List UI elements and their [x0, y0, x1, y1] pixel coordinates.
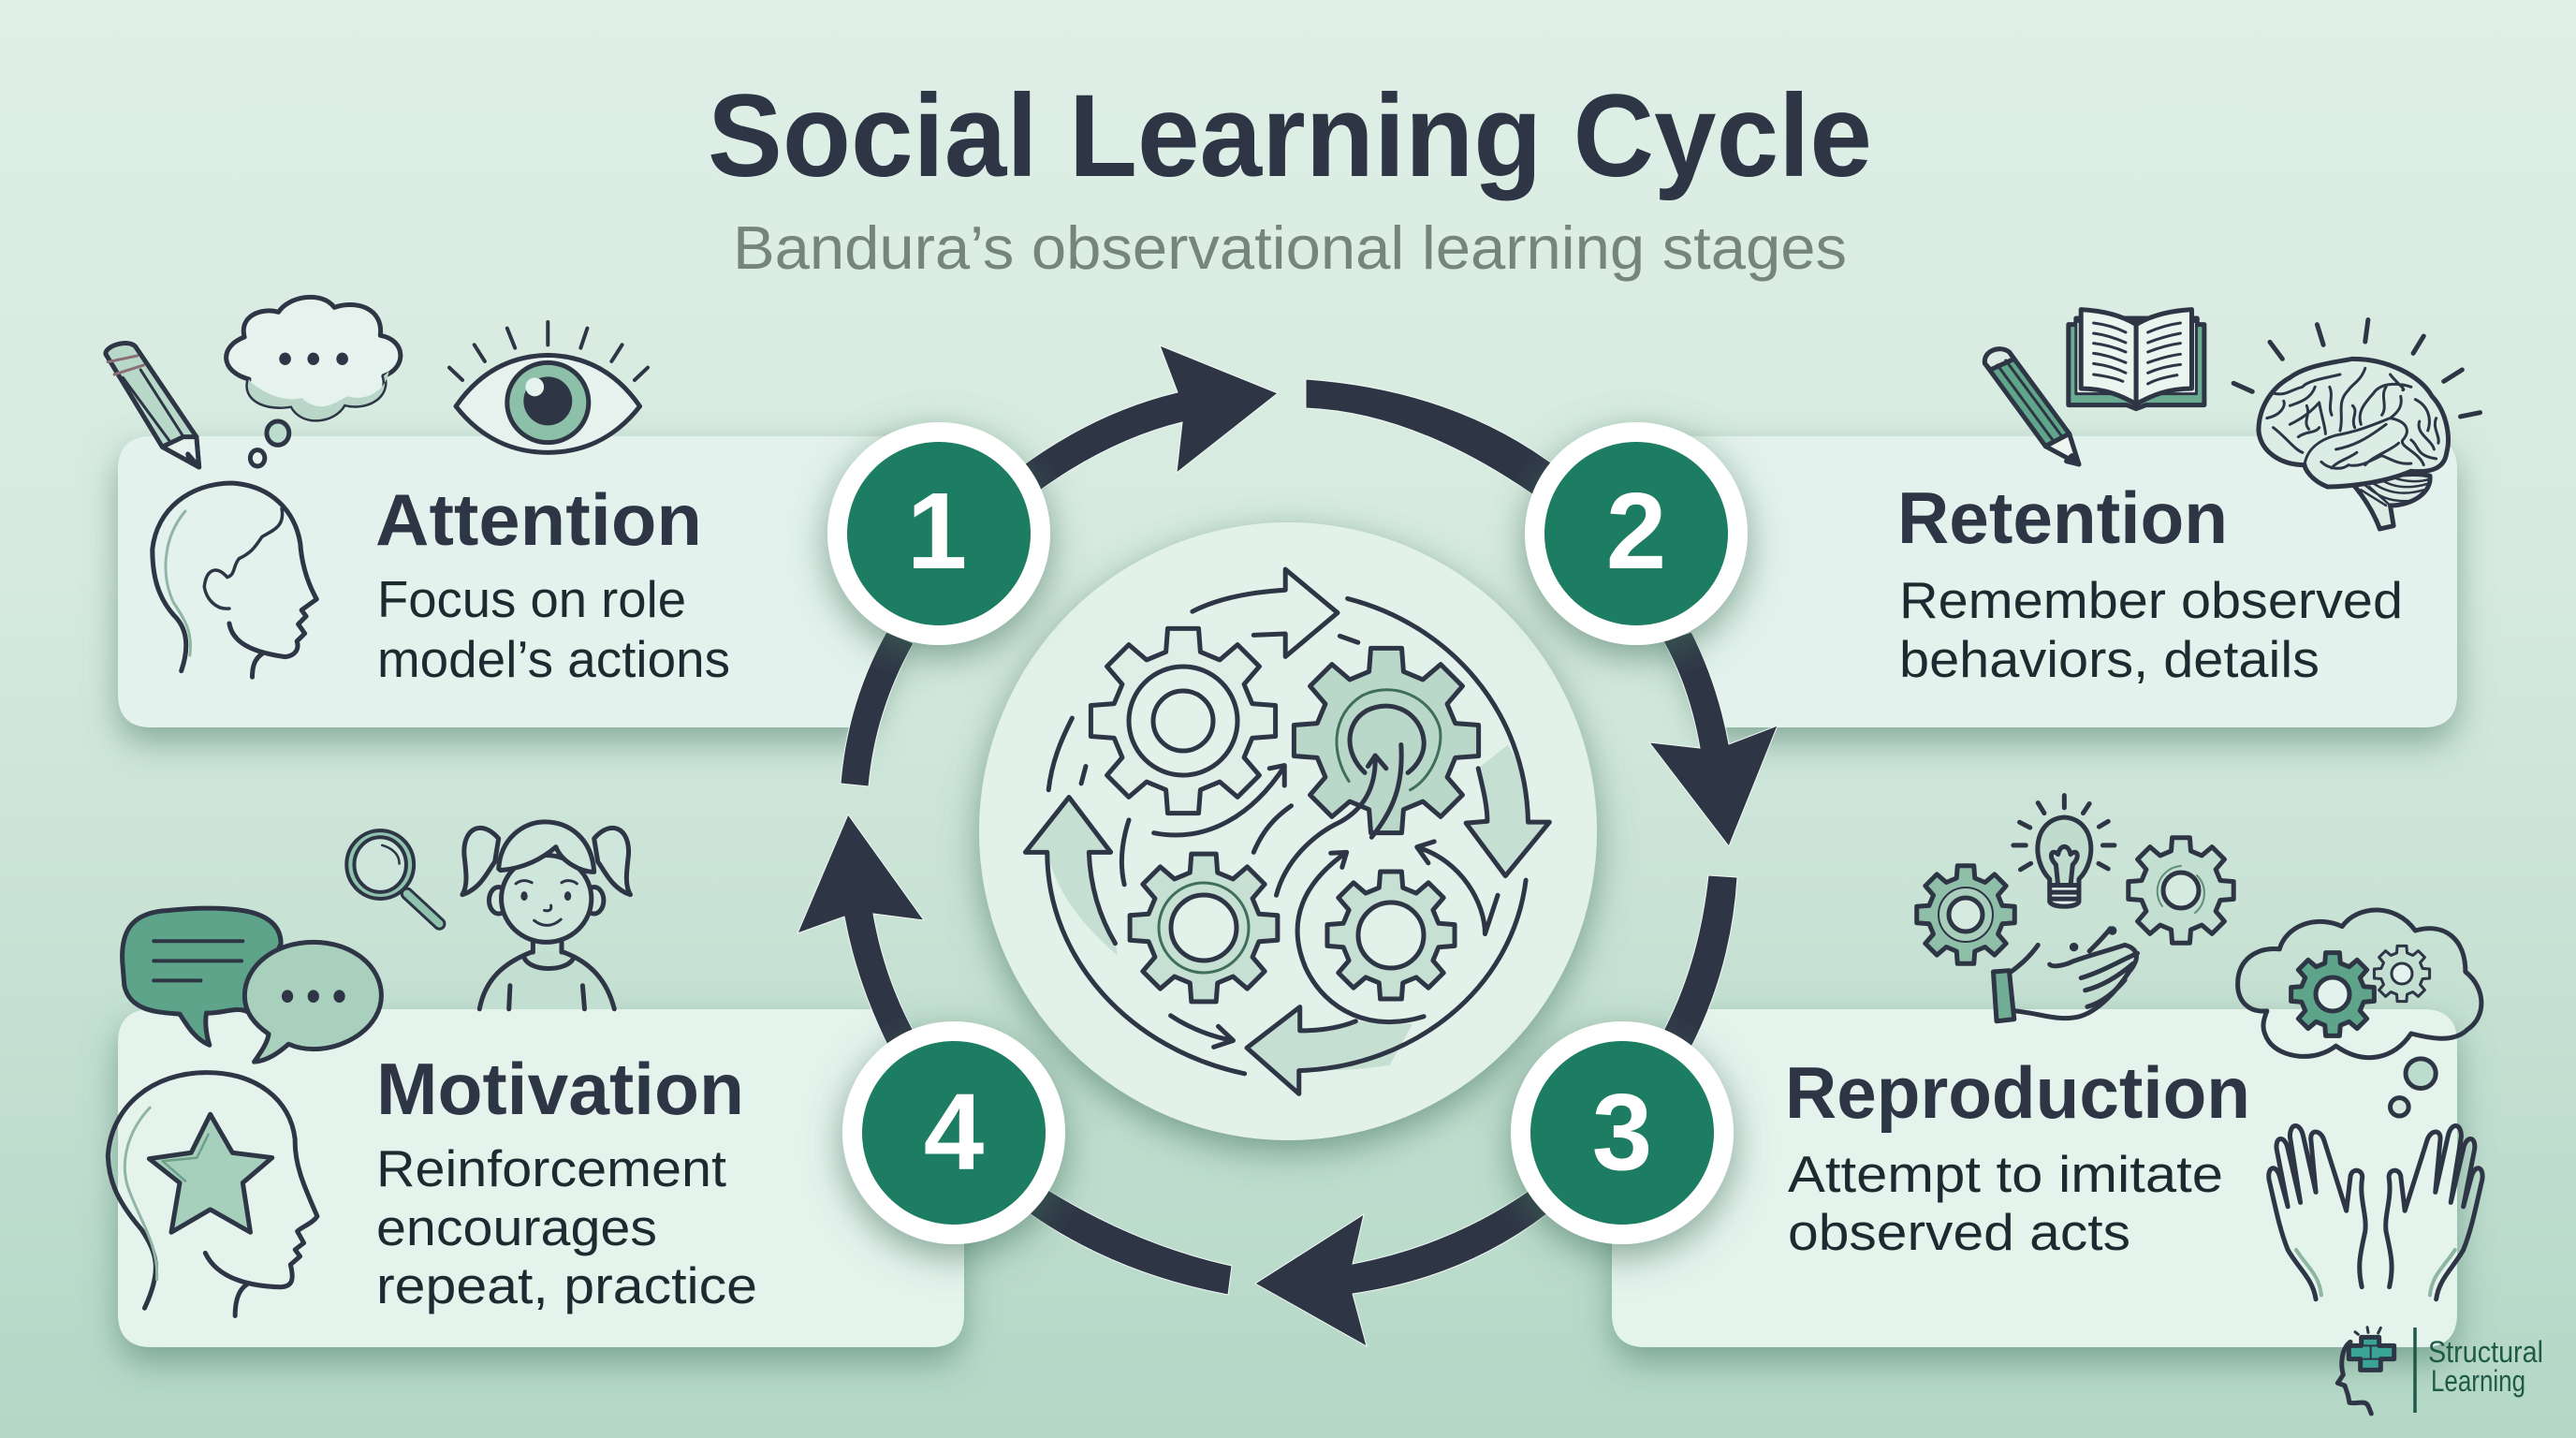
- icon: pencil: [106, 344, 199, 467]
- icon: speech bubbles: [123, 908, 381, 1062]
- arrow: 2 to 3: [1649, 632, 1778, 846]
- text: reproduction description: observed acts: [1788, 1203, 2130, 1261]
- number badge 2: [1525, 422, 1748, 645]
- gear: top left: [1090, 628, 1276, 814]
- center icon: gears and arrows: [1025, 569, 1549, 1093]
- arrow: 1 to 2: [1020, 345, 1278, 492]
- number badge 3: 3: [1592, 1071, 1652, 1193]
- logo text: Structural: [2428, 1335, 2543, 1369]
- cycle ring arrows: [798, 345, 1778, 1346]
- subtitle: Bandura’s observational learning stages: [733, 213, 1847, 282]
- number badge 1: [827, 422, 1050, 645]
- logo text: [2428, 1335, 2543, 1398]
- logo: Structural Learning: [2337, 1328, 2543, 1414]
- text: motivation description: [376, 1139, 757, 1314]
- icon: open hand: [1993, 929, 2137, 1021]
- icon: gear left: [1917, 866, 2014, 963]
- text: retention description: behaviors, details: [1899, 630, 2320, 688]
- text: attention description: Focus on role: [377, 570, 686, 628]
- heading: reproduction: Reproduction: [1785, 1051, 2250, 1134]
- text: reproduction description: [1788, 1145, 2223, 1261]
- text: attention description: model’s actions: [377, 630, 730, 688]
- icon: pencil: [1984, 349, 2079, 464]
- panel: reproduction: [1612, 796, 2482, 1347]
- arrow: 3 to 4: [1255, 1189, 1549, 1346]
- heading: retention: Retention: [1897, 477, 2228, 559]
- logo divider: [2413, 1328, 2417, 1413]
- icon: raised hands: [2269, 1125, 2482, 1299]
- text: motivation description: Reinforcement: [376, 1139, 726, 1197]
- panel: retention: [1636, 310, 2481, 727]
- arc: toward 3: [1661, 875, 1737, 1049]
- logo text: Learning: [2431, 1364, 2525, 1398]
- logo icon: [2337, 1328, 2394, 1414]
- icon: brain: [2233, 320, 2481, 529]
- panel: motivation: [108, 822, 964, 1347]
- heading: motivation: Motivation: [376, 1048, 744, 1130]
- gear: bottom left: [1130, 854, 1278, 1002]
- text: motivation description: encourages: [376, 1198, 657, 1256]
- icon: magnifying glass: [346, 830, 439, 924]
- text: retention description: Remember observed: [1899, 571, 2403, 629]
- text: motivation description: repeat, practice: [376, 1256, 757, 1314]
- icon: light bulb: [2013, 796, 2115, 906]
- icon: thought cloud: [227, 297, 401, 466]
- number badge 4: 4: [924, 1071, 984, 1193]
- title: Social Learning Cycle: [708, 71, 1872, 201]
- number badge 1: 1: [907, 470, 967, 592]
- icon: open book: [2069, 310, 2204, 409]
- gear: top right: [1294, 648, 1479, 833]
- arc: toward 4: [1028, 1189, 1232, 1295]
- text: retention description: [1899, 571, 2403, 688]
- center circle: [979, 522, 1597, 1140]
- icon: head profile: [153, 483, 316, 677]
- number badge 2: 2: [1606, 470, 1666, 592]
- heading: attention: Attention: [375, 478, 702, 561]
- panel: attention: [106, 297, 936, 727]
- arc: toward 1: [841, 632, 914, 786]
- icon: head with star: [108, 1073, 317, 1315]
- text: attention description: [377, 570, 730, 688]
- arc: toward 2: [1306, 379, 1556, 496]
- center arrows: [1025, 569, 1549, 1093]
- number badge 3: [1511, 1021, 1734, 1244]
- icon: gear right: [2129, 838, 2233, 943]
- icon: thought cloud with gears: [2238, 910, 2481, 1116]
- number badge 4: [842, 1021, 1065, 1244]
- text: reproduction description: Attempt to imitate: [1788, 1145, 2223, 1203]
- icon: child: [462, 822, 630, 1009]
- gear: bottom right: [1327, 872, 1455, 999]
- arrow: 4 to 1: [798, 814, 924, 1049]
- icon: eye: [449, 322, 648, 452]
